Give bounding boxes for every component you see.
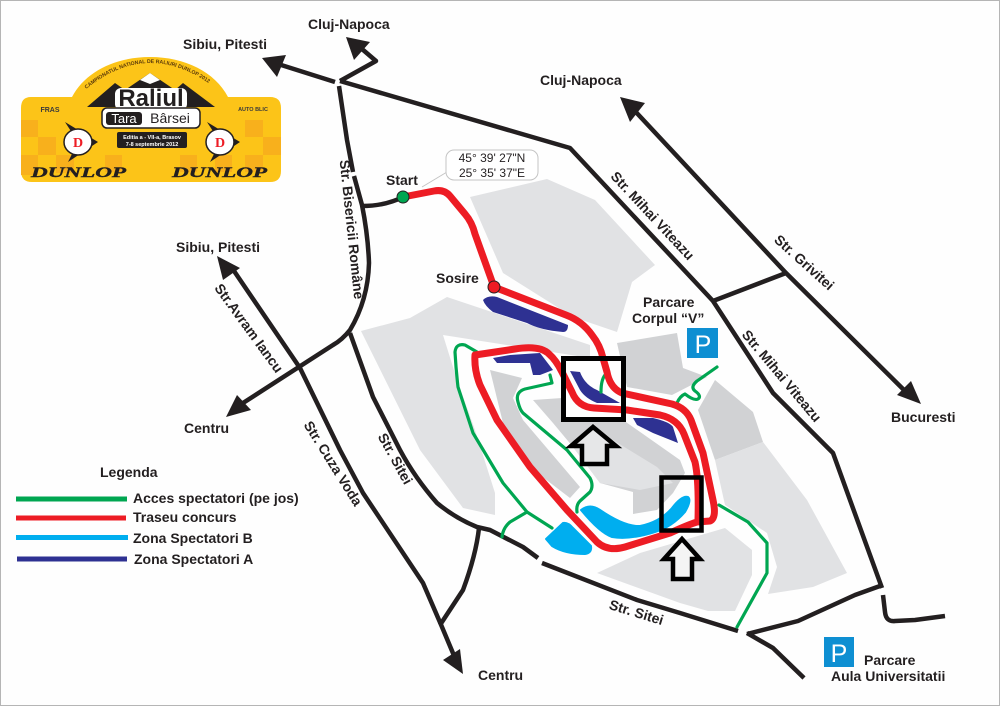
arrow: Sibiu, Pitesti north	[262, 55, 335, 82]
rally logo plate: Bârsei	[150, 110, 190, 126]
legend: Legenda	[100, 464, 158, 480]
finish marker: Sosire	[436, 270, 479, 286]
parking sign: Aula Universitatii	[824, 637, 945, 684]
highlight square 2	[662, 478, 702, 530]
parking sign: Corpul V: Parcare	[643, 294, 695, 310]
rally logo plate: CAMPIONATUL NATIONAL DE RALIURI DUNLOP 2012	[84, 59, 210, 88]
rally logo plate: D	[73, 136, 83, 151]
destination labels: Bucuresti	[891, 409, 956, 425]
spectator zones B	[546, 497, 689, 554]
street name labels: Str. Mihai Viteazu	[739, 327, 825, 425]
rally logo plate: 7-8 septembrie 2012	[126, 142, 178, 148]
parking sign: Corpul V: P	[695, 331, 711, 359]
rally logo plate	[21, 57, 281, 182]
start marker: Start	[386, 172, 418, 188]
street name labels: Str.Avram Iancu	[211, 280, 287, 376]
destination labels: Sibiu, Pitesti	[176, 239, 260, 255]
legend: Traseu concurs	[133, 509, 237, 525]
rally logo plate: Raliul	[118, 85, 184, 112]
legend: Acces spectatori (pe jos)	[133, 490, 299, 506]
callout: GPS coordinates	[422, 150, 538, 187]
destination labels	[176, 16, 956, 683]
arrow: Cluj-Napoca north	[340, 37, 376, 81]
destination labels: Centru	[478, 667, 523, 683]
destination labels: Sibiu, Pitesti	[183, 36, 267, 52]
rally logo plate: FRAS	[40, 107, 60, 114]
arrow: points to highlight square 1	[571, 427, 616, 464]
spectator zones A	[483, 296, 678, 443]
rally logo plate: DUNLOP	[170, 165, 268, 181]
legend	[16, 464, 299, 567]
finish marker	[436, 270, 500, 293]
street name labels: Str. Cuza Voda	[301, 418, 366, 509]
arrow: Cluj-Napoca to Bucuresti on Str. Grivitei	[620, 97, 921, 404]
terrain: grey building blocks	[361, 179, 847, 611]
destination labels: Cluj-Napoca	[308, 16, 390, 32]
race route	[403, 191, 714, 549]
rally logo plate: DUNLOP	[29, 165, 127, 181]
arrow: points to highlight square 2	[664, 539, 700, 579]
parking sign: Aula Universitatii: Aula Universitatii	[831, 668, 945, 684]
arrow heads: Sibiu west, Centru west, Centru south	[217, 256, 463, 674]
start marker	[386, 172, 418, 203]
rally logo plate: Editia a - VII-a, Brasov	[123, 135, 182, 141]
highlight square 1	[564, 358, 624, 420]
rally logo plate: Tara	[111, 111, 137, 126]
street network	[232, 81, 945, 678]
callout: GPS coordinates: 25° 35' 37"E	[459, 166, 525, 180]
parking sign: Corpul V	[632, 294, 718, 359]
street name labels	[211, 159, 837, 628]
street name labels: Str. Mihai Viteazu	[608, 168, 698, 263]
legend: Zona Spectatori A	[134, 551, 253, 567]
parking sign: Aula Universitatii: Parcare	[864, 652, 916, 668]
destination labels: Centru	[184, 420, 229, 436]
parking sign: Corpul V: Corpul “V”	[632, 310, 704, 326]
street name labels: Str. Sitei	[375, 430, 416, 487]
spectator access paths	[455, 345, 767, 627]
callout: GPS coordinates: 45° 39' 27"N	[459, 151, 525, 165]
destination labels: Cluj-Napoca	[540, 72, 622, 88]
rally logo plate: AUTO BLIC	[238, 107, 268, 113]
street name labels: Str. Bisericii Române	[337, 159, 367, 300]
street name labels: Str. Grivitei	[771, 231, 837, 293]
legend: Zona Spectatori B	[133, 530, 253, 546]
parking sign: Aula Universitatii: P	[831, 640, 847, 668]
rally logo plate: D	[215, 136, 225, 151]
street name labels: Str. Sitei	[607, 596, 666, 628]
